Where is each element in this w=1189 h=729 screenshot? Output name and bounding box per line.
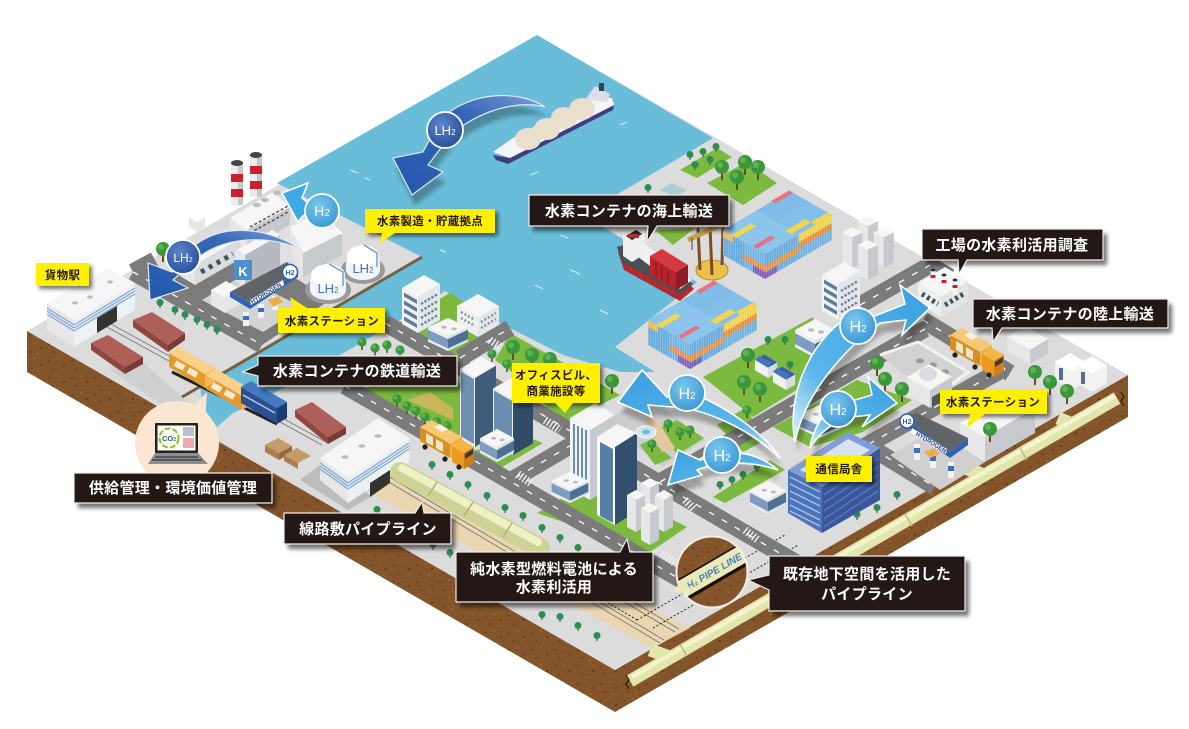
soil: right face: [615, 375, 1128, 712]
label: 既存地下空間を活用したパイプライン: [748, 556, 969, 616]
white cuboid fuel cells upper right: [842, 216, 894, 280]
long building: [180, 230, 240, 285]
label: 水素ステーション left: [278, 297, 388, 336]
label: 既存地下空間を活用したパイプライン: パイプライン: [821, 586, 913, 603]
truck: land transport: [950, 328, 1004, 378]
main hall: [230, 191, 290, 250]
label: 水素製造・貯蔵拠点: 水素製造・貯蔵拠点: [377, 214, 483, 228]
label: オフィスビル、商業施設等: オフィスビル、: [515, 368, 597, 382]
arrow: H2 to fuel cell: [668, 437, 781, 495]
white factory behind station: [960, 394, 1035, 462]
tower 1: [460, 356, 496, 447]
label: 水素ステーション right: [940, 390, 1050, 428]
K tower: K: [238, 264, 248, 279]
trees mid right: [870, 356, 909, 402]
label: 工場の水素利活用調査: 工場の水素利活用調査: [935, 237, 1089, 254]
label: オフィスビル、商業施設等: [512, 363, 603, 413]
fountain: [636, 426, 656, 438]
hydrogen station right: H2: [903, 419, 912, 426]
laptop icon: CO2: [162, 434, 176, 443]
arrow: H2 to station: [810, 377, 900, 458]
office towers: [460, 356, 786, 545]
label: 水素コンテナの海上輸送: [529, 195, 733, 242]
red container stacks: [91, 312, 346, 444]
貨物駅 station building: [47, 268, 135, 347]
water: [177, 35, 713, 427]
tank: LH2 front: [305, 264, 351, 304]
hydrogen station left: [230, 262, 298, 326]
label: 水素コンテナの鉄道輸送: [243, 356, 461, 391]
arrow: H2 factory: H2: [314, 203, 330, 219]
tank: LH2 front: LH2: [317, 281, 339, 296]
arrow: H2 to offices: [618, 370, 783, 468]
label: 通信局舎: 通信局舎: [815, 462, 863, 476]
rounded-roof building: [457, 294, 499, 337]
label: 純水素型燃料電池による水素利活用: 水素利活用: [516, 579, 592, 596]
street trees: [156, 143, 900, 641]
arrow: H2 to offices: H2: [678, 386, 696, 403]
blue tower: [597, 424, 637, 525]
label: オフィスビル、商業施設等: 商業施設等: [526, 384, 586, 398]
freight station 2: [300, 418, 409, 510]
tank: LH2: LH2: [352, 261, 374, 276]
building by the arrow: [822, 262, 860, 320]
rail bed and tracks: [107, 324, 798, 648]
label: 貨物駅: [36, 263, 92, 289]
label: 工場の水素利活用調査: [922, 229, 1107, 274]
label: 線路敷パイプライン: [284, 502, 455, 549]
magnifier: pipeline: H₂ PIPE LINE: [685, 551, 745, 592]
arrow: H2 to factory: [793, 285, 933, 452]
port: container yards: [648, 190, 832, 369]
label: 水素ステーション right: 水素ステーション: [946, 395, 1040, 409]
label: 水素コンテナの海上輸送: 水素コンテナの海上輸送: [545, 202, 713, 220]
stepped plant block: [290, 217, 342, 277]
white block: [211, 289, 240, 313]
arrow: H2 to factory: H2: [849, 319, 867, 336]
plant with fence: [880, 342, 968, 408]
label: 水素コンテナの陸上輸送: 水素コンテナの陸上輸送: [986, 305, 1154, 323]
label: 水素コンテナの陸上輸送: [973, 299, 1172, 342]
arrow: LH2 to port: [393, 96, 548, 205]
factory complex: [180, 152, 345, 313]
label: 供給管理・環境価値管理: 供給管理・環境価値管理: [89, 479, 257, 497]
label: 貨物駅: 貨物駅: [45, 268, 80, 282]
label: 水素製造・貯蔵拠点: [365, 209, 498, 243]
hydrogen station left: HYDROGEN: [250, 283, 283, 306]
hydrogen station right: [890, 413, 985, 490]
label: 線路敷パイプライン: 線路敷パイプライン: [299, 520, 437, 538]
building in green plot: [799, 405, 841, 438]
label: 水素ステーション left: 水素ステーション: [285, 314, 379, 328]
white tower: [570, 403, 615, 500]
label: 既存地下空間を活用したパイプライン: 既存地下空間を活用した: [783, 565, 951, 583]
arrow: LH2 to station: LH2: [173, 251, 193, 265]
LNG carrier: [493, 83, 614, 164]
laptop bubble: [135, 392, 219, 485]
surface pipeline along the rail: [400, 468, 540, 548]
mid-rise buildings by the bay: [402, 275, 499, 351]
magnifier: pipeline: [672, 536, 748, 608]
container ship: [617, 230, 694, 301]
underground pipeline: [626, 392, 1124, 689]
buildings on the far right: [1007, 326, 1107, 404]
label: 供給管理・環境価値管理: [74, 473, 276, 508]
hydrogen station left: H2: [286, 270, 295, 277]
label: 純水素型燃料電池による水素利活用: 純水素型燃料電池による: [470, 560, 638, 578]
factory upper right: [918, 267, 968, 317]
small rooftop unit: [189, 217, 205, 232]
hydrogen station right: HYDROGEN: [914, 432, 947, 455]
wooden pallets: [265, 438, 311, 469]
port: gantry crane: [688, 224, 730, 280]
arrow: H2 to station: H2: [829, 402, 847, 419]
green areas: [363, 148, 912, 552]
label: 通信局舎: [806, 456, 875, 485]
soil: left face: [27, 331, 615, 712]
arrow: H2 factory: [282, 183, 342, 234]
tank: LH2: [341, 245, 385, 284]
arrow: LH2 to port: LH2: [434, 123, 456, 138]
tower 2: [493, 377, 533, 455]
arrow: LH2 to station: [148, 230, 302, 300]
label: 純水素型燃料電池による水素利活用: [456, 539, 657, 607]
freight train: [169, 347, 287, 424]
arrow: H2 to fuel cell: H2: [713, 448, 731, 465]
roads: [133, 240, 1010, 585]
chimneys: [231, 152, 262, 205]
K tower: [234, 230, 280, 285]
telecom building: [788, 432, 880, 533]
label: 水素コンテナの鉄道輸送: 水素コンテナの鉄道輸送: [273, 362, 441, 380]
factory body: [230, 207, 345, 290]
houses: [755, 355, 795, 390]
truck: road: [420, 420, 474, 470]
